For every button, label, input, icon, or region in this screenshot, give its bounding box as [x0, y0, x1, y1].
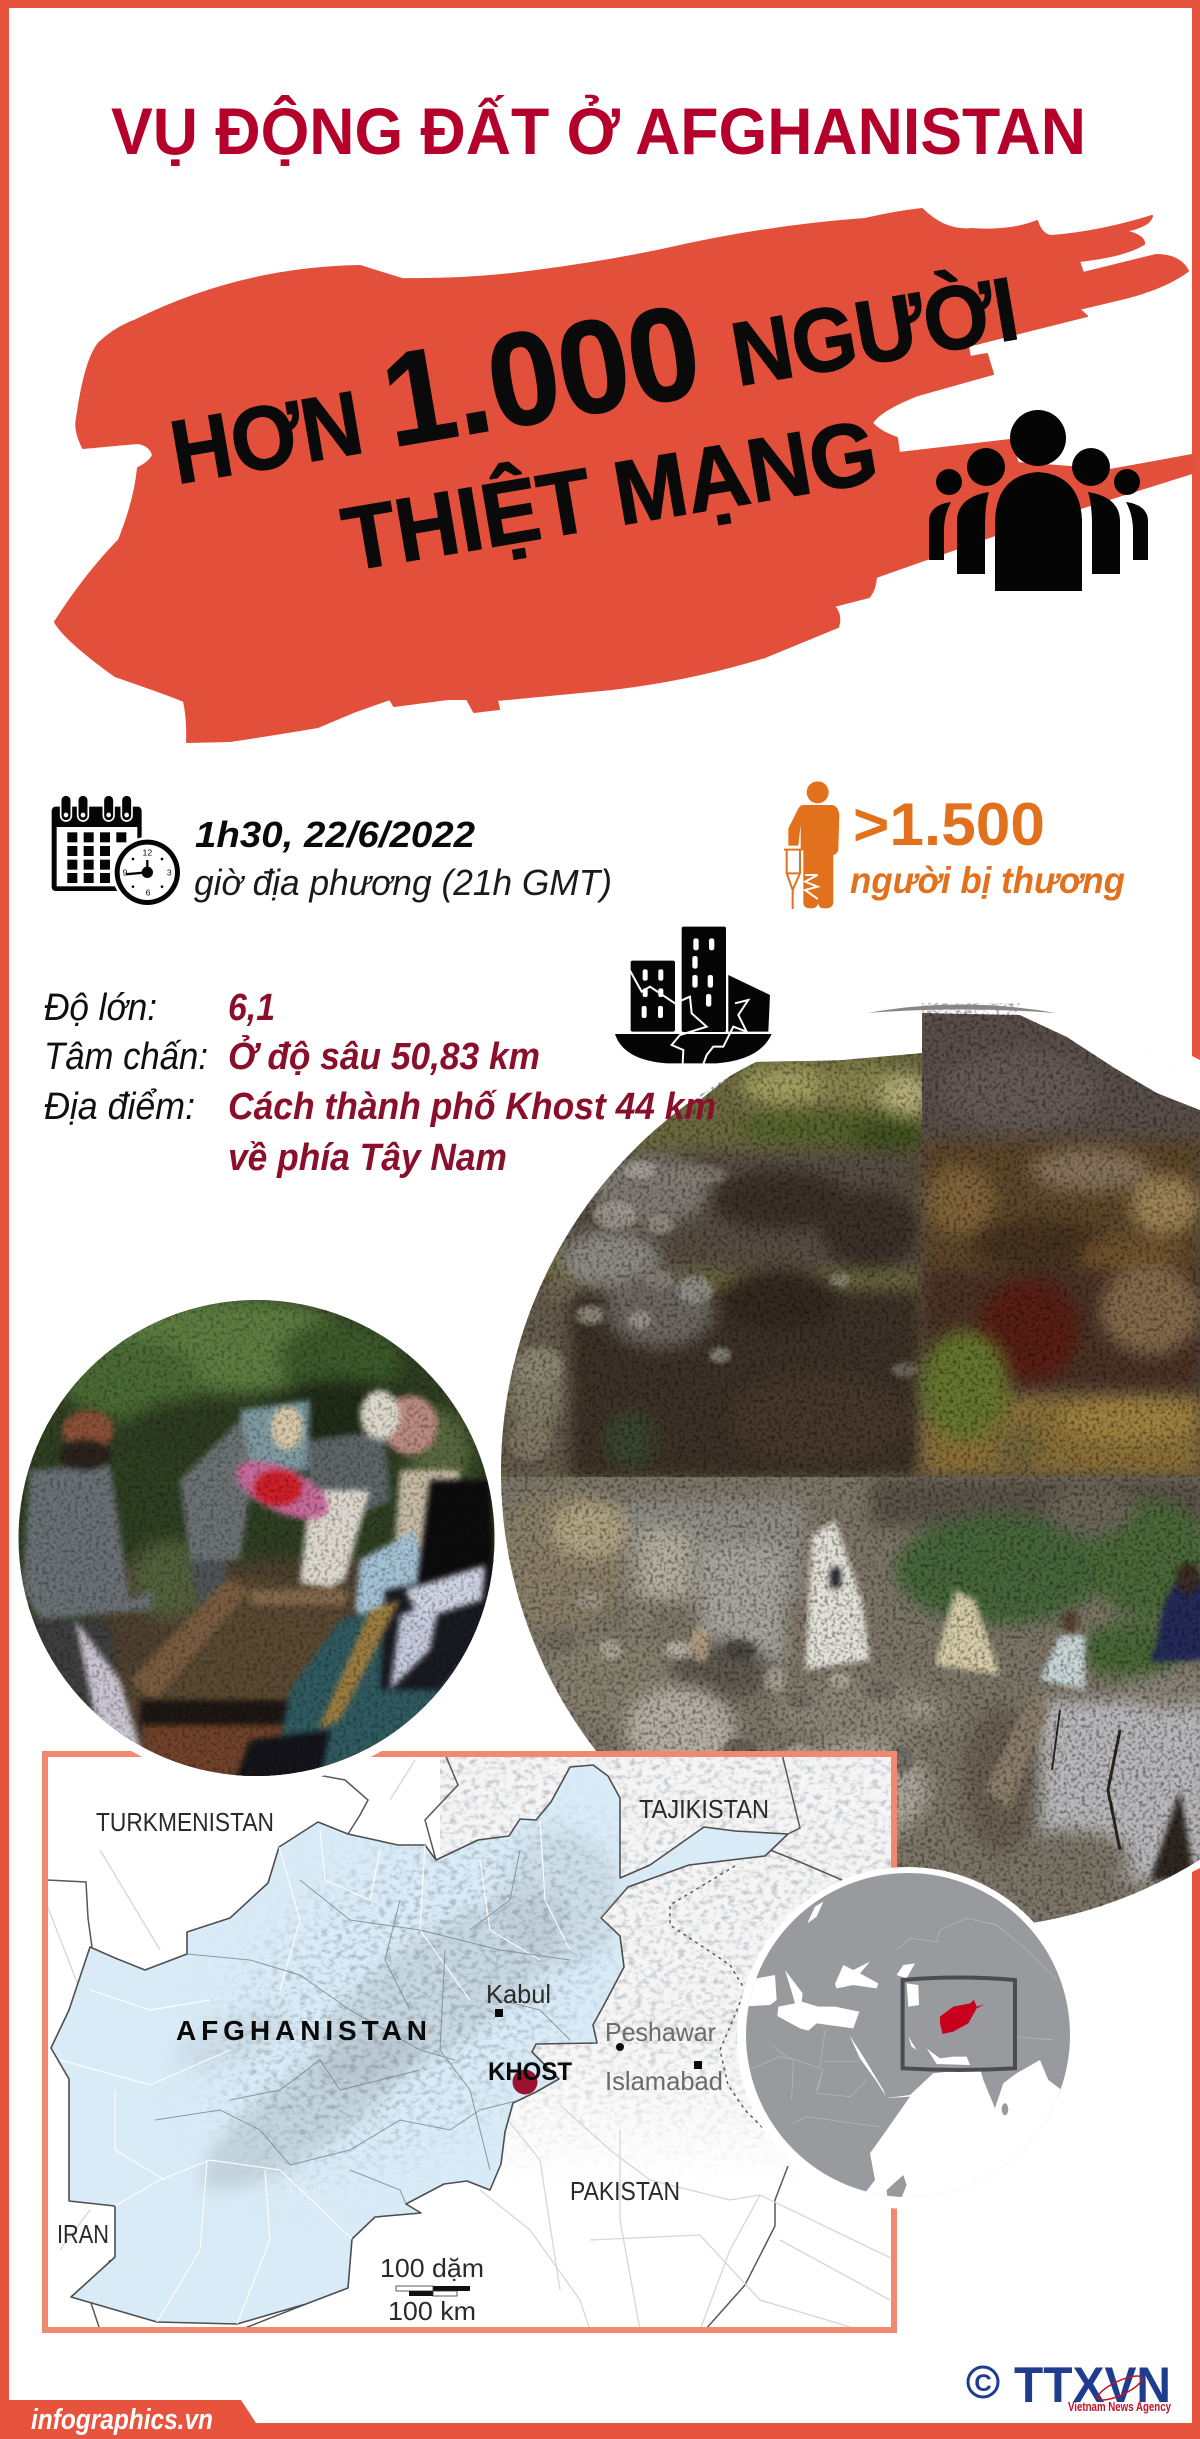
icon: calendar and clock: 6 [146, 887, 151, 897]
date and time text [194, 814, 612, 903]
photo collage: earthquake damage [480, 1000, 1200, 1950]
map labels: PAKISTAN [570, 2176, 680, 2206]
door and ground [132, 1576, 344, 1710]
sky cover above left hill [690, 1000, 1060, 1100]
globe: country borders [748, 1918, 1057, 2127]
date and time text: giờ địa phương (21h GMT) [194, 862, 612, 903]
map labels: TAJIKISTAN [639, 1794, 769, 1824]
headline: Hơn 1.000 người thiệt mạng [164, 258, 1025, 591]
map labels: TURKMENISTAN [96, 1807, 274, 1837]
details list: magnitude, epicentre, location [44, 987, 716, 1179]
icon: injured person on crutch [784, 781, 839, 909]
map: neighbouring borders and roads [47, 1754, 842, 2330]
footer band [0, 2400, 1200, 2439]
injured count [850, 791, 1125, 901]
panel: rescue photo circle [18, 1300, 494, 1776]
locator map [42, 1751, 900, 2333]
title: VỤ ĐỘNG ĐẤT Ở AFGHANISTAN [111, 94, 1086, 168]
details list: magnitude, epicentre, location: Tâm chấn: [44, 1036, 208, 1078]
stretcher group [180, 1420, 260, 1560]
photo grain [490, 1000, 1200, 1950]
photo: hillside and rubble [480, 1053, 930, 1480]
icon: calendar and clock: 9 [123, 868, 128, 878]
map labels: 100 km [388, 2296, 476, 2326]
map labels: Kabul [486, 1979, 551, 2009]
rubble blocks [544, 1590, 934, 1776]
injured count: >1.500 [853, 791, 1045, 858]
map label: Afghanistan: AFGHANISTAN [176, 2015, 427, 2046]
map labels [57, 1794, 769, 2326]
panel: globe inset [737, 1867, 1070, 2209]
headline: Hơn 1.000 người thiệt mạng: THIỆT MẠNG [335, 400, 885, 591]
hill cap [868, 1004, 1056, 1013]
map labels: Pakistani cities: Peshawar [605, 2017, 716, 2047]
logo: TTXVN: TTXVN [1014, 2357, 1171, 2413]
injured count: người bị thương [850, 860, 1125, 901]
map labels: 100 dặm [380, 2253, 484, 2283]
footer band: infographics.vn [31, 2404, 213, 2436]
map terrain [440, 1754, 900, 2184]
icon: cracked buildings [615, 927, 772, 1064]
details list: magnitude, epicentre, location: về phía Tây Nam [228, 1137, 507, 1179]
people right [395, 1470, 460, 1560]
rubble stones [508, 1161, 919, 1460]
globe: Afghanistan highlight [940, 2000, 985, 2034]
globe: oceans [748, 1902, 1060, 2197]
details list: magnitude, epicentre, location: Địa điểm: [44, 1086, 195, 1128]
globe: inset frame [903, 1977, 1015, 2070]
details list: magnitude, epicentre, location: Độ lớn: [44, 987, 157, 1029]
photo: ruined village below hill [920, 1013, 1200, 1480]
icon: calendar and clock: 12 [143, 848, 152, 858]
icon: calendar and clock [52, 795, 183, 908]
headline: Hơn 1.000 người thiệt mạng: 1.000 [372, 277, 710, 475]
map: Afghanistan territory [51, 1765, 788, 2324]
red brush stroke banner [55, 209, 1192, 742]
photo: collapsed houses [490, 1477, 1200, 1947]
details list: magnitude, epicentre, location: Ở độ sâu 50,83 km [228, 1034, 540, 1078]
map labels: Pakistani cities: Islamabad [605, 2066, 723, 2096]
globe: Madagascar and Sri Lanka [886, 2175, 907, 2197]
city markers [495, 2009, 702, 2069]
icon: calendar and clock: 3 [167, 868, 172, 878]
details list: magnitude, epicentre, location: 6,1 [228, 987, 275, 1029]
details list: magnitude, epicentre, location: Cách thành phố Khost 44 km [228, 1086, 716, 1128]
people left [22, 1465, 155, 1620]
map labels: Pakistani cities [605, 2017, 723, 2096]
date and time text: 1h30, 22/6/2022 [195, 814, 475, 855]
map frame [45, 1754, 894, 2330]
epicentre marker: Khost: KHOST [488, 2058, 572, 2086]
map scale bar [396, 2286, 470, 2296]
headline: Hơn 1.000 người thiệt mạng: NGƯỜI [724, 258, 1025, 406]
logo: TTXVN: C [974, 2370, 992, 2397]
sky covers above hills [1020, 1000, 1200, 1110]
icon: group of people [929, 410, 1148, 591]
map: terrain shading and provinces [60, 1804, 634, 2324]
map labels: IRAN [57, 2219, 109, 2249]
headline: Hơn 1.000 người thiệt mạng: HƠN [164, 373, 370, 504]
